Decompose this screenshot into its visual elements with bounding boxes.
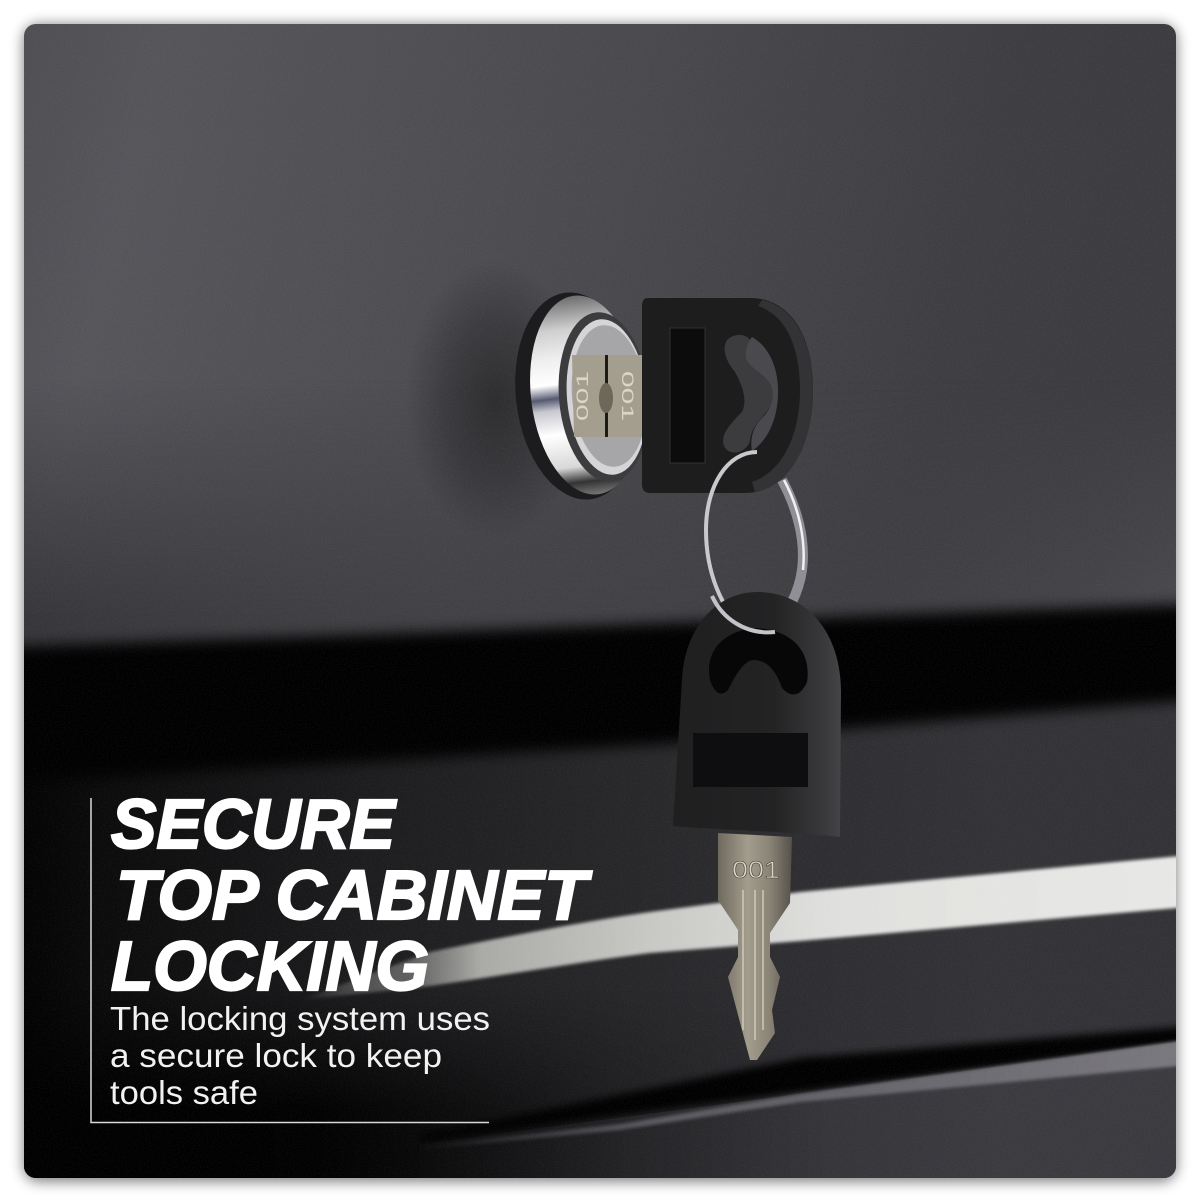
callout bracket (91, 798, 489, 1122)
dark ledge under the wall (0, 602, 1200, 786)
heading: TOP CABINET (116, 856, 592, 934)
description: The locking system uses (110, 1000, 490, 1037)
key plate with engraved number: 001 (573, 371, 592, 421)
lock outer collar (504, 285, 652, 507)
key plate with engraved number (572, 355, 645, 437)
key head lobed tab (723, 335, 774, 453)
heading (111, 785, 592, 1005)
description (110, 1000, 490, 1111)
key head recessed label (670, 328, 705, 463)
key plate with engraved number: 001 (618, 371, 637, 421)
upper cabinet wall (24, 24, 1176, 724)
heading: SECURE (111, 785, 397, 863)
hanging key label recess (693, 733, 808, 787)
lock cylinder (504, 285, 656, 507)
key head in lock (642, 298, 813, 493)
ring passing through key head (712, 596, 775, 632)
dark recess above lower drawer (443, 1024, 1176, 1136)
chrome handle strip (300, 854, 1200, 1000)
key head opening (746, 337, 778, 451)
lock inner ring (552, 308, 656, 486)
hanging key (673, 592, 841, 1060)
left-side darkening of drawers (24, 748, 754, 1178)
hanging key opening (709, 628, 808, 694)
lower drawer face (507, 1042, 1176, 1178)
lower drawer highlight strip (452, 1039, 1176, 1146)
key head outer ring highlight (752, 300, 813, 492)
key blade (718, 833, 792, 1060)
hanging key head (673, 592, 841, 837)
middle drawer face (0, 680, 1200, 1178)
heading: LOCKING (111, 927, 429, 1005)
split key ring (706, 452, 804, 632)
text callout (91, 785, 592, 1122)
description: a secure lock to keep (110, 1037, 442, 1074)
description: tools safe (110, 1074, 258, 1111)
key number: 001 (732, 857, 780, 884)
